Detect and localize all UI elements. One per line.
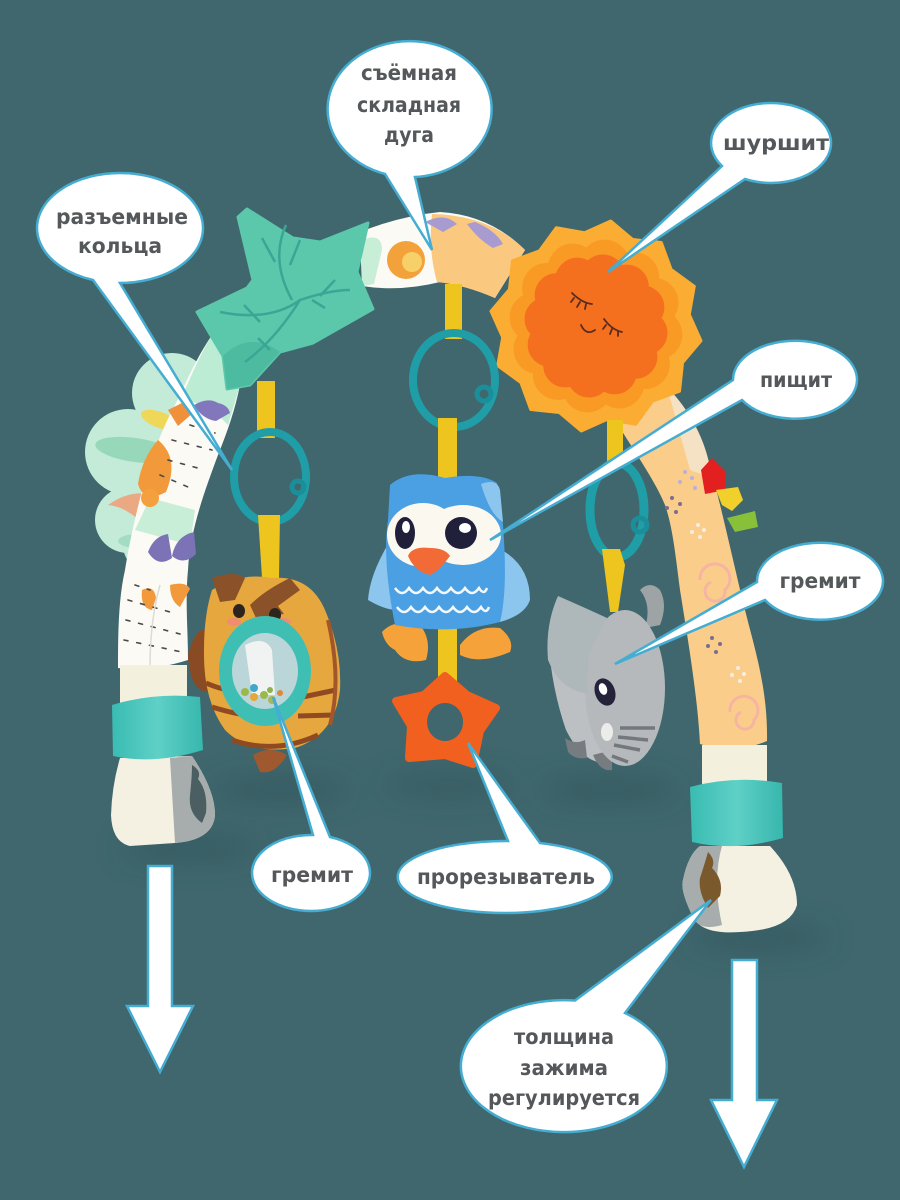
owl feet <box>382 623 511 661</box>
floor shadows <box>120 775 830 950</box>
callout: clamp thickness: регулируется <box>488 1086 640 1110</box>
owl wings <box>368 530 530 622</box>
bee side seam <box>328 620 336 725</box>
left ring <box>234 432 306 522</box>
clamp body <box>682 846 797 932</box>
sun <box>476 206 716 446</box>
callout: rustles <box>608 103 831 272</box>
bee wing <box>188 629 212 692</box>
fabric: left leg <box>118 335 240 669</box>
teal band <box>112 696 203 759</box>
callout: split rings <box>37 173 232 470</box>
toy arch <box>85 206 797 932</box>
strap <box>257 381 275 438</box>
fabric: right leg <box>612 387 767 749</box>
arrow: left down <box>127 866 193 1072</box>
callout: rattles, elephant <box>615 543 883 664</box>
callout: removable arch: складная <box>357 93 461 117</box>
callout: squeaks <box>490 341 857 540</box>
strap lower <box>438 625 457 687</box>
owl face <box>387 503 501 567</box>
clamp body <box>111 756 215 846</box>
callout: split rings: разъемные <box>56 205 188 229</box>
hanging toy: left ring and bee rattle <box>188 381 340 772</box>
strap top <box>445 284 462 339</box>
post <box>702 745 767 785</box>
owl waves <box>395 588 489 612</box>
bee stripes <box>206 683 336 746</box>
sun core <box>515 245 677 407</box>
callout: removable arch <box>328 41 492 250</box>
callout: rattles, bee: гремит <box>271 863 354 887</box>
sun scallops <box>498 228 694 424</box>
callout: rustles: шуршит <box>723 131 830 155</box>
owl beak <box>408 548 450 575</box>
callout: removable arch: съёмная <box>361 61 457 85</box>
leaf <box>197 209 373 389</box>
strap middle <box>438 418 457 478</box>
cloud leaf teether <box>85 353 212 572</box>
star teether <box>396 676 496 764</box>
arrow: right down <box>711 960 777 1167</box>
strap top <box>607 420 623 466</box>
callout: clamp thickness: толщина <box>514 1025 614 1049</box>
bee tail <box>253 750 287 772</box>
callout: clamp thickness: зажима <box>520 1056 608 1080</box>
teal band <box>690 780 783 846</box>
sun rays <box>476 206 716 446</box>
hanging toy: right ring and elephant <box>547 420 665 770</box>
elephant trunk stripes <box>612 728 655 762</box>
elephant tusk <box>601 723 613 741</box>
right clamp <box>682 745 797 932</box>
callout: clamp thickness <box>461 900 711 1132</box>
bee bows <box>212 574 300 618</box>
callout: removable arch: дуга <box>384 123 434 147</box>
elephant eye <box>591 675 619 709</box>
fabric: top of arch <box>360 212 525 298</box>
left clamp <box>111 665 215 846</box>
strap lower <box>258 515 280 578</box>
callout: rattles, bee <box>252 697 370 911</box>
callout: teether: прорезыватель <box>417 865 595 889</box>
elephant ear <box>547 596 607 694</box>
right ring <box>590 463 647 557</box>
owl eyes <box>395 517 477 549</box>
bee face <box>227 604 291 626</box>
rattle window <box>219 616 311 726</box>
callout: teether <box>398 743 612 913</box>
elephant tail <box>640 585 664 628</box>
callout: split rings: кольца <box>78 234 162 258</box>
ribbon tags <box>701 458 758 532</box>
elephant body <box>548 640 625 763</box>
hanging toy: centre ring, owl and teether <box>368 284 530 764</box>
elephant head <box>585 610 665 766</box>
bee body <box>204 576 340 750</box>
owl ear <box>481 482 503 522</box>
callout: rattles, elephant: гремит <box>780 569 861 593</box>
post <box>120 665 187 707</box>
centre ring <box>413 333 495 427</box>
callout: squeaks: пищит <box>760 368 833 392</box>
strap lower <box>602 549 625 612</box>
elephant feet <box>565 738 612 770</box>
owl body <box>386 474 505 629</box>
sun face <box>571 293 622 336</box>
